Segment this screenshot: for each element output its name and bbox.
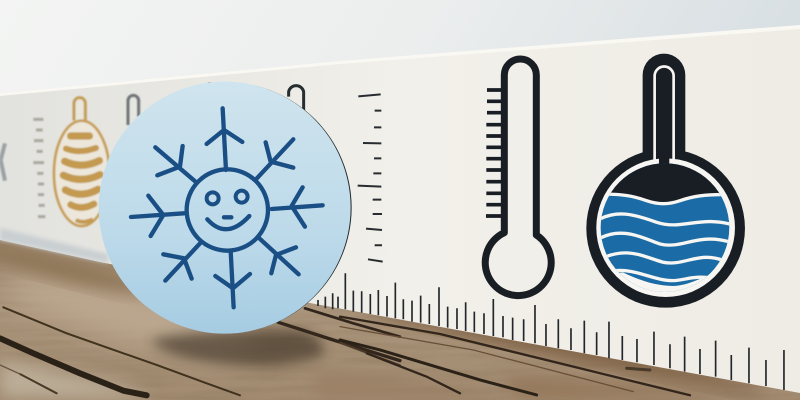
table cracks [0, 307, 400, 395]
wooden table [0, 225, 800, 400]
snowflake face [187, 169, 268, 251]
icon: smiling snowflake [131, 108, 323, 307]
disc shadow on the table [150, 330, 324, 366]
blurred far ruler marks and icons [1, 95, 139, 226]
bottom ruler ticks [318, 273, 784, 390]
icon: water thermometer [586, 54, 745, 308]
thermometer outline [485, 59, 551, 296]
vertical scale ticks [358, 94, 383, 262]
icon: thermometer [485, 59, 551, 296]
stem inner outline [655, 66, 674, 167]
tube icon behind the disc [207, 83, 304, 113]
snowflake disc [99, 82, 352, 334]
thermometer scale marks [486, 90, 501, 216]
water thermometer stem [643, 54, 685, 163]
water thermometer bulb ring [586, 149, 745, 308]
water waves [600, 163, 730, 292]
blurred scale ticks [33, 119, 45, 217]
blurred gold ornament icon [54, 98, 109, 226]
disc face [99, 82, 351, 334]
snowflake arms [207, 108, 242, 170]
bulb bottom white gap [619, 272, 704, 292]
blurred x mark [1, 143, 5, 181]
blurred tube icon [128, 95, 139, 125]
disc edge [101, 82, 352, 333]
